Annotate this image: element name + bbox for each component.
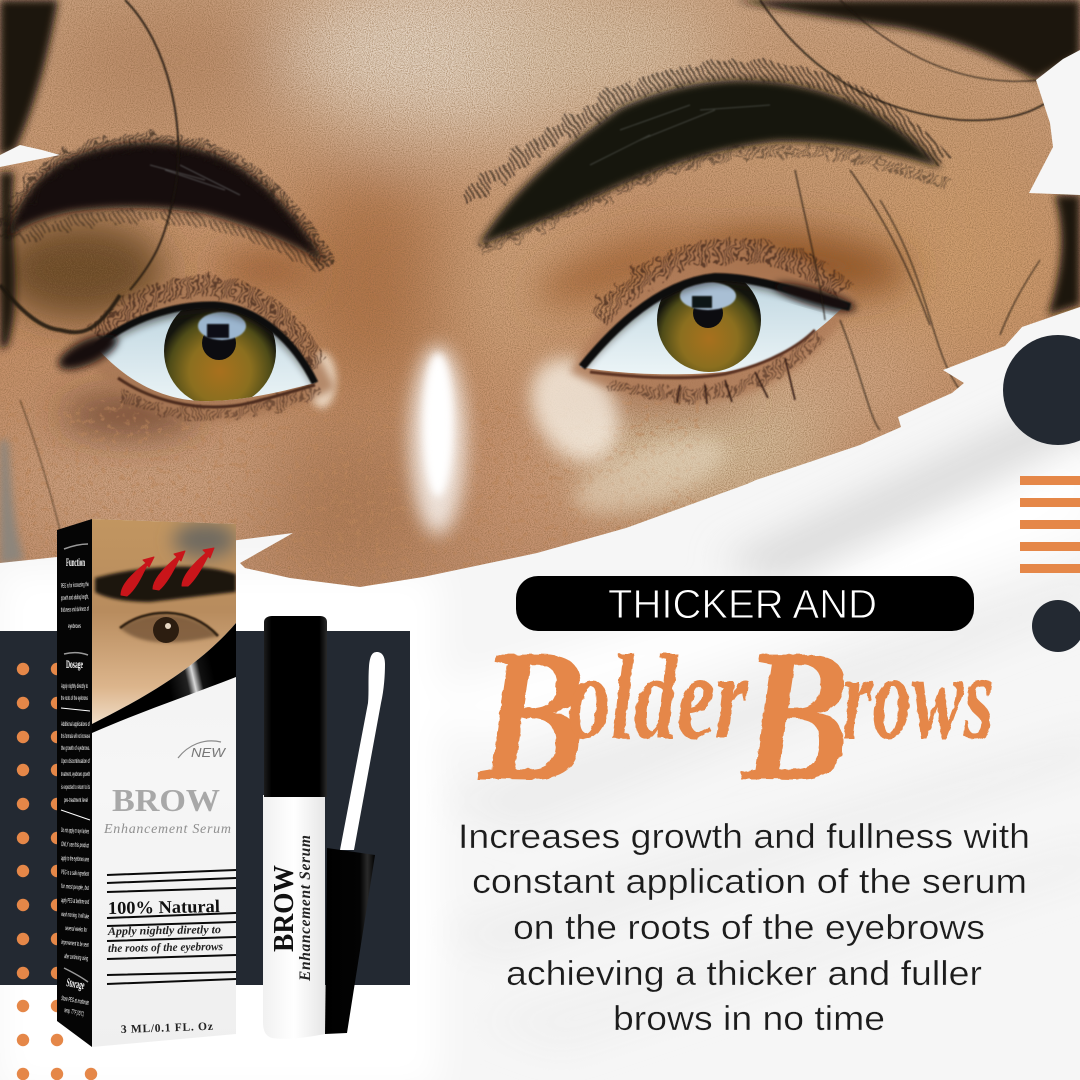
box volume: 3 ML/0.1 FL. Oz (121, 1021, 213, 1036)
box photo of eye and brow (92, 515, 238, 730)
loose hair strands (0, 0, 1050, 530)
product box: growth and adding length, (61, 594, 89, 602)
box brand name: BROW (112, 782, 220, 818)
right decoration: small circle (1032, 600, 1080, 652)
product box (57, 515, 238, 1047)
product box: the roots of the eyebrows (61, 695, 88, 702)
body copy (458, 818, 1030, 1038)
right decoration: large circle (1003, 335, 1080, 445)
product box: apply PEG at bedtime and (61, 897, 89, 906)
box side panel: Dosage (66, 657, 83, 671)
box front panel (92, 519, 236, 1047)
right decoration: orange bars (1020, 476, 1080, 573)
skin tones (0, 0, 1060, 590)
product box: apply to the eyebrows area (61, 855, 89, 863)
new badge: NEW (191, 746, 226, 760)
tube cap (264, 616, 327, 797)
dark panel behind product (0, 631, 410, 985)
heading pill: thicker and: THICKER AND (608, 581, 877, 627)
script heading: bolder brows: B (740, 611, 850, 821)
box side panel: for most people, but (61, 883, 89, 892)
script heading: bolder brows: older (568, 630, 749, 765)
skin texture and freckles (2, 400, 700, 554)
left eyebrow (8, 142, 326, 268)
box side panel: eyebrows (68, 623, 81, 630)
box ruled lines with claims: 100% Natural (108, 896, 220, 918)
box ruled lines with claims: Apply nightly diretly to (107, 924, 221, 938)
box ruled lines with claims: the roots of the eyebrows (108, 941, 224, 955)
box side panel: several weeks for (65, 925, 88, 934)
product box: after continuing using (64, 953, 89, 963)
body copy: on the roots of the eyebrows (513, 909, 985, 947)
box subtitle: Enhancement Serum (103, 822, 231, 837)
highlights on nose and cheek (308, 342, 735, 535)
product box: PEG is for increasing the (61, 581, 89, 590)
box side panel: temp. 77°F (25°C) (64, 1006, 85, 1018)
box side panel (57, 519, 92, 1047)
eyelid shadows (0, 219, 913, 435)
product box: wash morning. It will take (60, 911, 89, 920)
product box: Upon discontinuation of (61, 758, 90, 765)
right eye (570, 240, 858, 404)
product box: is expected to return to its (61, 784, 90, 791)
tube label: BROW (269, 865, 300, 952)
left eye (54, 278, 335, 421)
product box: Do not apply on eye lashes (61, 827, 89, 835)
product box: improvement to be seen (61, 939, 90, 949)
product box: thickness and darkness of (61, 606, 89, 614)
product box: treatment, eyebrows growth (61, 771, 90, 778)
script heading: bolder brows: B (476, 611, 586, 821)
body copy: constant application of the serum (472, 863, 1027, 901)
product box: PEG is a safe ingredient (61, 869, 89, 878)
hair: corners and edges (0, 0, 1080, 565)
box side panel: Function (66, 555, 85, 569)
serum tube (263, 616, 327, 1039)
heading pill: thicker and (516, 576, 974, 631)
product box: this formula will not increase (61, 733, 90, 740)
body copy: Increases growth and fullness with (458, 818, 1030, 856)
photo: close-up of eyes and brows (0, 0, 1080, 600)
product box: the growth of eyebrows. (61, 745, 90, 752)
product box: Apply nightly directly to (61, 683, 88, 690)
product box: Additional applications of (61, 721, 90, 728)
body copy: achieving a thicker and fuller (506, 955, 982, 993)
body copy: brows in no time (613, 1000, 885, 1038)
red growth arrows (121, 548, 214, 596)
box side panel: Storage (65, 975, 86, 992)
script heading: bolder brows: rows (842, 630, 994, 765)
product box: ONLY use this product (61, 841, 89, 849)
applicator wand and cap (325, 652, 385, 1034)
right eyebrow (462, 70, 950, 250)
new badge (178, 741, 226, 760)
black swoosh (92, 623, 236, 733)
tube label: Enhancement Serum (297, 835, 314, 982)
box ruled lines with claims (107, 870, 236, 984)
tube body (263, 795, 325, 1039)
dot grid (17, 663, 97, 1080)
tube label (269, 835, 314, 982)
product box: Store PEG at moderate (61, 995, 90, 1007)
box side panel: pre-treatment level (64, 797, 88, 804)
